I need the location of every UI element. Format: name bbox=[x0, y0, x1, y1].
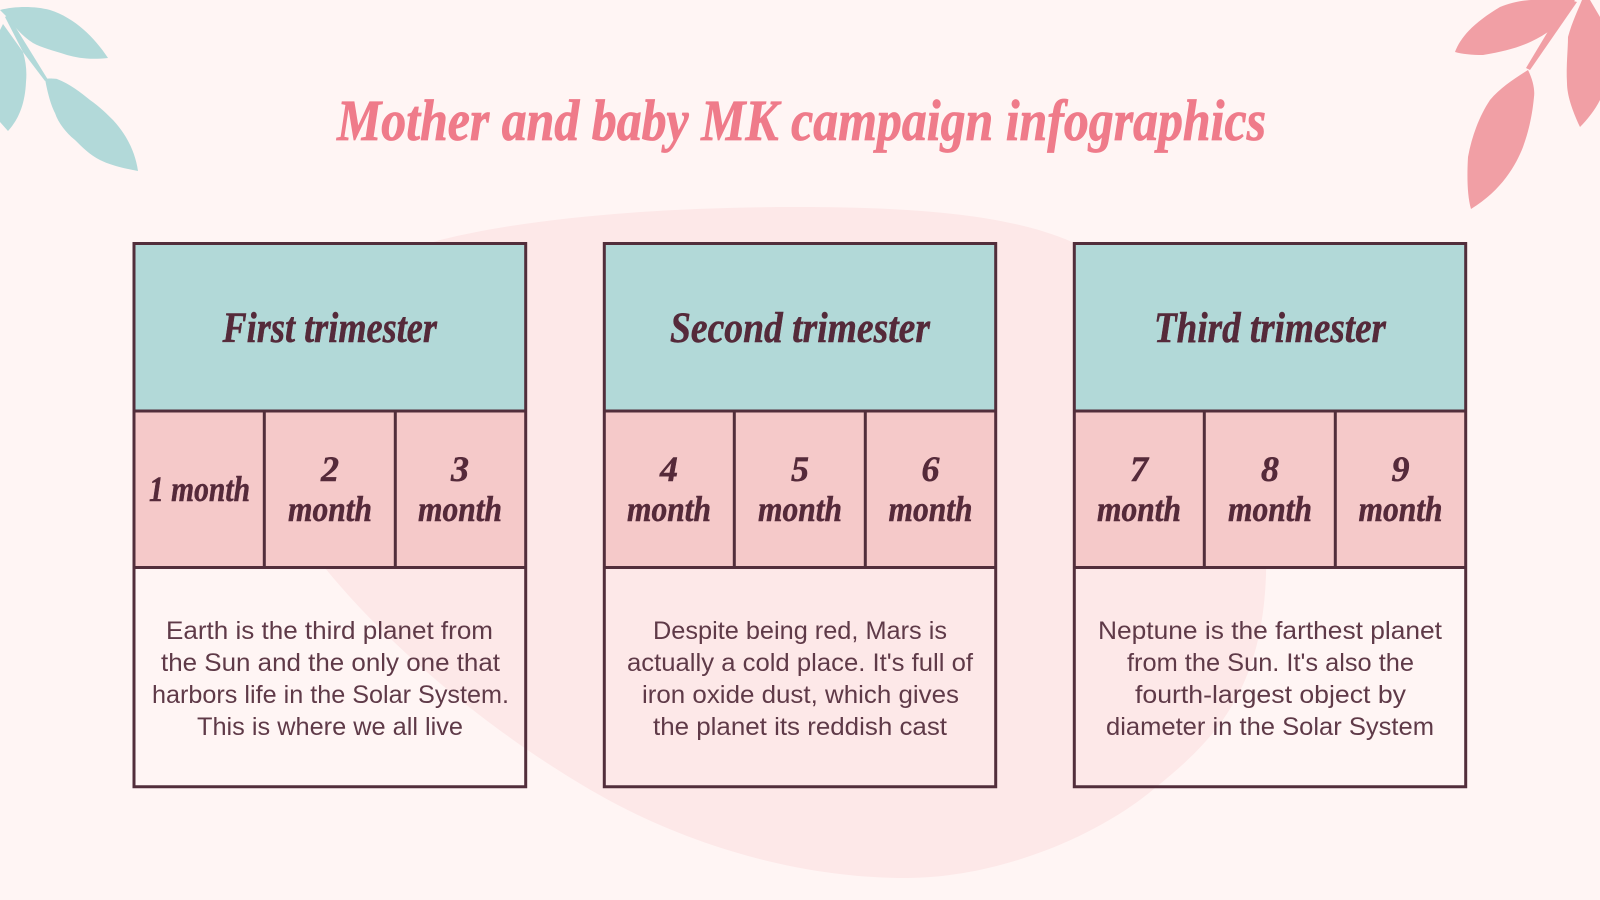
panel frame bbox=[134, 244, 526, 787]
header: third trimester bbox=[1074, 244, 1466, 411]
header: third trimester: Third trimester bbox=[1154, 305, 1387, 352]
months row: 1 month bbox=[149, 469, 250, 509]
header: second trimester bbox=[604, 244, 996, 411]
description: actually a cold place. It's full of bbox=[627, 649, 973, 677]
months row: 3 bbox=[450, 449, 469, 489]
description: This is where we all live bbox=[197, 713, 463, 741]
description: the planet its reddish cast bbox=[653, 713, 947, 741]
months row: 4 bbox=[659, 449, 678, 489]
months row: 7 bbox=[1130, 449, 1150, 489]
months row: month bbox=[288, 489, 372, 529]
months row: 2 bbox=[320, 449, 339, 489]
months row: 8 bbox=[1261, 449, 1279, 489]
description: the Sun and the only one that bbox=[161, 649, 500, 677]
header: second trimester: Second trimester bbox=[670, 305, 931, 352]
description: iron oxide dust, which gives bbox=[642, 681, 959, 709]
panel frame bbox=[604, 244, 996, 787]
months row: month bbox=[1097, 489, 1181, 529]
description: harbors life in the Solar System. bbox=[152, 681, 509, 709]
months row bbox=[1074, 411, 1466, 568]
months row: 9 bbox=[1392, 449, 1410, 489]
months row: month bbox=[418, 489, 502, 529]
months row: 5 bbox=[791, 449, 809, 489]
description bbox=[627, 617, 973, 741]
months row: month bbox=[627, 489, 711, 529]
months row: month bbox=[1228, 489, 1312, 529]
months row: month bbox=[1358, 489, 1442, 529]
panel frame bbox=[1074, 244, 1466, 787]
icon: pink leaves bbox=[1455, 0, 1600, 209]
icon: teal leaves bbox=[0, 7, 138, 171]
header: first trimester: First trimester bbox=[222, 305, 438, 352]
description: Earth is the third planet from bbox=[166, 617, 493, 645]
panel: second trimester bbox=[604, 244, 996, 787]
panel: third trimester bbox=[1074, 244, 1466, 787]
months row bbox=[134, 411, 526, 568]
description: fourth-largest object by bbox=[1135, 681, 1407, 709]
description: diameter in the Solar System bbox=[1106, 713, 1434, 741]
months row: 6 bbox=[922, 449, 940, 489]
description bbox=[1098, 617, 1442, 741]
header: first trimester bbox=[134, 244, 526, 411]
panel: first trimester bbox=[134, 244, 526, 787]
months row: month bbox=[888, 489, 972, 529]
description bbox=[152, 617, 509, 741]
description: from the Sun. It's also the bbox=[1127, 649, 1414, 677]
background blob bbox=[290, 207, 1266, 878]
months row bbox=[604, 411, 996, 568]
months row: month bbox=[758, 489, 842, 529]
title: Mother and baby MK campaign infographics bbox=[336, 88, 1266, 153]
description: Despite being red, Mars is bbox=[653, 617, 947, 645]
description: Neptune is the farthest planet bbox=[1098, 617, 1442, 645]
